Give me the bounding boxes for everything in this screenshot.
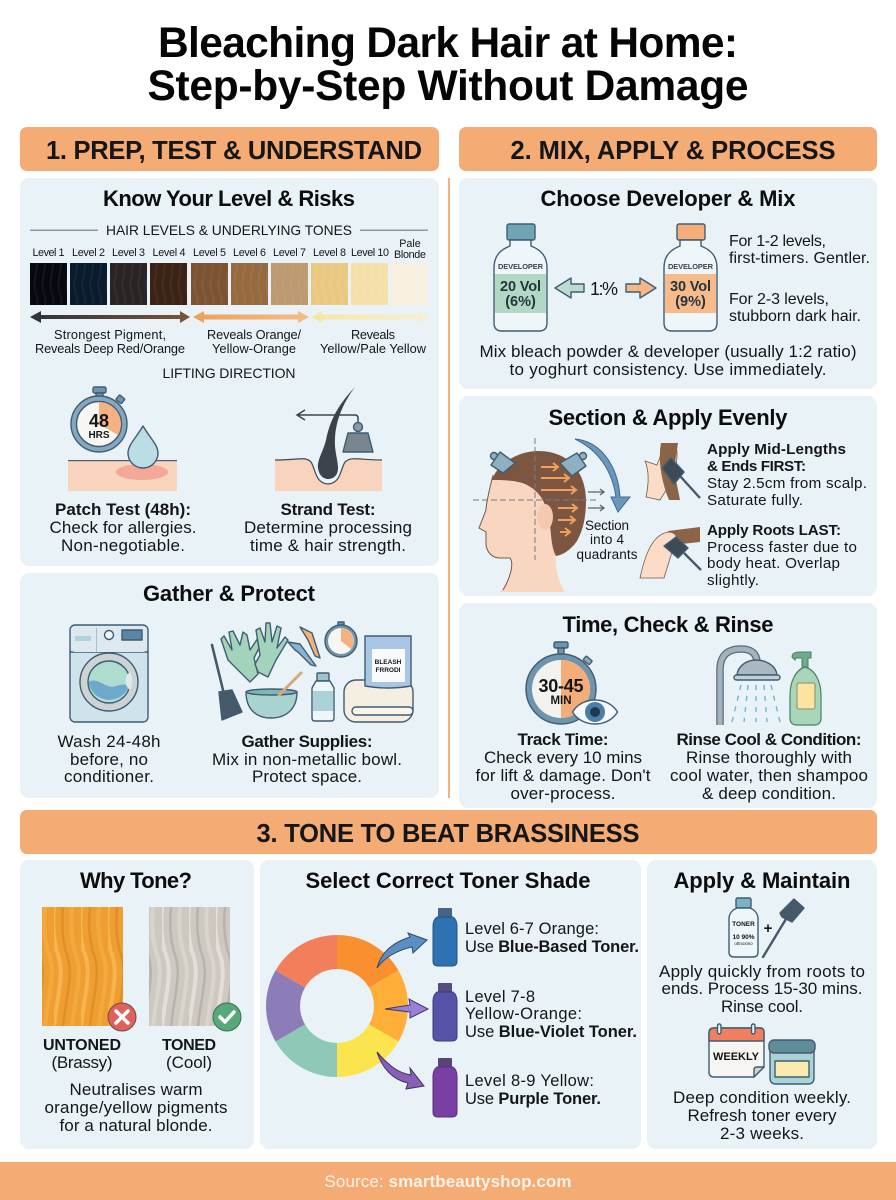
text: 30 vol use (729, 291, 861, 325)
text: strand test (244, 500, 412, 555)
text: apply: Rinse cool. (721, 997, 803, 1016)
swatch: untoned hair (42, 907, 123, 1026)
icon: stopwatch with eye (526, 642, 618, 724)
icon: patch test stopwatch and drop (68, 387, 177, 491)
icon: bottle 20 vol: (6%) (505, 294, 536, 310)
text: rinse: & deep condition. (702, 784, 836, 803)
text: track time: for lift & damage. Don't (476, 766, 651, 785)
level labels: Level 7 (273, 247, 306, 259)
text: why tone (44, 1080, 228, 1135)
icon: toner bottle and brush: ottnoxino (734, 941, 753, 946)
text: why tone: orange/yellow pigments (44, 1098, 228, 1117)
level labels: Level 5 (193, 247, 226, 259)
footer: source (0, 1162, 896, 1200)
level labels (32, 238, 426, 261)
label: ratio: 1:% (590, 279, 618, 299)
text: wash (58, 732, 160, 786)
icon: patch test stopwatch and drop: 48 (89, 411, 109, 431)
arrow: left (555, 278, 584, 298)
section header 3 (20, 810, 877, 854)
heading: Choose Developer & Mix (540, 186, 796, 211)
text: apply: Apply quickly from roots to (659, 962, 865, 981)
title: Bleaching Dark Hair at Home: (158, 20, 738, 67)
level labels: Pale (399, 238, 421, 250)
tone descriptions: Reveals (351, 327, 395, 342)
heading: Why Tone? (80, 868, 192, 893)
icon: toner bottle and brush: + (764, 920, 773, 937)
icon: developer bottle (312, 673, 334, 721)
heading: Apply & Maintain (674, 868, 850, 893)
text: level 8-9 (465, 1072, 601, 1108)
tone descriptions: Yellow-Orange (212, 341, 296, 356)
clips (490, 452, 586, 476)
icon: washing machine (70, 625, 148, 722)
icon: toner bottle and brush (729, 898, 804, 957)
icon: patch test stopwatch and drop: HRS (88, 430, 110, 441)
subheading: hair levels: HAIR LEVELS & UNDERLYING TONES (106, 223, 352, 238)
hair level swatches (30, 263, 428, 305)
icon: bottle 20 vol: 20 Vol (500, 279, 541, 295)
text: maintain: 2-3 weeks. (720, 1124, 804, 1143)
panel: apply and maintain (647, 860, 877, 1149)
icon: hand applying to roots (640, 527, 701, 578)
text: level 6-7: Use Blue-Based Toner. (465, 938, 639, 956)
chart: colour wheel (266, 935, 408, 1077)
section header 2: 2. MIX, APPLY & PROCESS (510, 137, 836, 165)
icon: strand test (275, 387, 382, 491)
icon: weekly calendar (709, 1024, 764, 1077)
text: apply: ends. Process 15-30 mins. (662, 979, 862, 998)
arrows on hair (541, 463, 577, 536)
icon: bleach bag (365, 636, 411, 688)
level labels: Level 2 (72, 247, 105, 259)
text: 30 vol use: stubborn dark hair. (729, 308, 861, 325)
text: roots: Process faster due to (707, 539, 857, 556)
level labels: Level 10 (351, 247, 389, 259)
level labels: Level 6 (233, 247, 266, 259)
section header 1: 1. PREP, TEST & UNDERSTAND (46, 137, 422, 165)
text: gather supplies: Mix in non-metallic bowl. (212, 750, 402, 769)
text: patch test: Non-negotiable. (61, 536, 185, 555)
heading: Time, Check & Rinse (562, 612, 774, 637)
text: track time: Track Time: (518, 730, 608, 749)
text: roots (707, 522, 857, 589)
icon: brush (212, 645, 242, 720)
text: track time: over-process. (510, 784, 616, 803)
text: mid-lengths (707, 441, 867, 509)
icon: blue-violet toner bottle (433, 983, 457, 1041)
title (148, 20, 748, 110)
section header 2 (459, 127, 877, 171)
text: apply (659, 962, 865, 1016)
text: section: Section (585, 518, 629, 533)
text: section: quadrants (576, 547, 638, 562)
text: mix instructions: to yoghurt consistency. Use immediately. (510, 360, 826, 379)
icon: bleach bag: FRRODI (376, 667, 401, 674)
tone descriptions: Reveals Deep Red/Orange (35, 341, 185, 356)
label: lifting direction: LIFTING DIRECTION (162, 365, 296, 381)
level labels: Blonde (394, 249, 426, 261)
text: level 6-7: Level 6-7 Orange: (465, 920, 599, 938)
icon: toner bottle and brush: TONER (732, 921, 755, 928)
icon: toner bottle and brush: 10 90% (732, 934, 755, 941)
text: level 7-8: Level 7-8 (465, 988, 535, 1006)
icon: hand applying to lengths (645, 443, 700, 500)
icon: bottle 30 vol (664, 224, 717, 331)
heading: Section & Apply Evenly (548, 405, 788, 430)
section header 3: 3. TONE TO BEAT BRASSINESS (256, 820, 640, 848)
icon: red cross badge (108, 1003, 136, 1031)
footer: source: Source: smartbeautyshop.com (324, 1172, 572, 1191)
text: gather supplies: Gather Supplies: (242, 732, 372, 751)
text: track time: Check every 10 mins (484, 748, 642, 767)
panel: select toner shade (260, 860, 641, 1149)
icon: gloves (221, 623, 288, 682)
text: roots: body heat. Overlap (707, 555, 840, 572)
text: mid-lengths: & Ends FIRST: (707, 458, 806, 475)
icon: stopwatch with eye: MIN (550, 695, 572, 707)
text: level 7-8: Yellow-Orange: (465, 1005, 582, 1023)
arrow: curved blue (575, 439, 630, 512)
icon: green check badge (213, 1003, 241, 1031)
panel: why tone (20, 860, 254, 1149)
icon: bottle 30 vol: (9%) (675, 294, 706, 310)
text: level 8-9: Use Purple Toner. (465, 1090, 601, 1108)
tone arrows (30, 311, 429, 323)
text: gather supplies: Protect space. (252, 767, 362, 786)
section header 1 (20, 127, 439, 171)
text: gather supplies (212, 732, 402, 786)
panel: choose developer and mix (459, 178, 877, 389)
title: Step-by-Step Without Damage (148, 63, 748, 110)
text: wash: conditioner. (64, 767, 154, 786)
panel: time check and rinse (459, 603, 877, 808)
label: toned: TONED (162, 1037, 216, 1054)
icon: bottle 20 vol: DEVELOPER (498, 262, 544, 271)
text: 20 vol use: first-timers. Gentler. (729, 250, 870, 267)
icon: conditioner bottle (790, 652, 821, 725)
heading: Select Correct Toner Shade (306, 868, 590, 893)
tone descriptions: Yellow/Pale Yellow (320, 341, 427, 356)
text: level 8-9: Level 8-9 Yellow: (465, 1072, 594, 1090)
icon: blue toner bottle (433, 908, 457, 966)
label: untoned: (Brassy) (52, 1053, 112, 1072)
heading: Gather & Protect (143, 581, 316, 606)
text: mix instructions (480, 342, 856, 379)
text: why tone: for a natural blonde. (60, 1116, 212, 1135)
level labels: Level 8 (313, 247, 346, 259)
text: why tone: Neutralises warm (70, 1080, 202, 1099)
label: untoned (43, 1037, 121, 1072)
text: strand test: Determine processing (244, 518, 412, 537)
text: rinse (670, 730, 868, 803)
text: 20 vol use: For 1-2 levels, (729, 233, 826, 250)
arrow: to blue-violet toner (385, 999, 428, 1018)
tone descriptions: Reveals Orange/ (207, 327, 301, 342)
arrow: to blue toner (377, 933, 427, 968)
text: rinse: cool water, then shampoo (670, 766, 868, 785)
text: level 7-8: Use Blue-Violet Toner. (465, 1023, 637, 1041)
text: maintain (673, 1088, 851, 1143)
panel: section and apply evenly (459, 396, 877, 596)
icon: stopwatch with eye: 30-45 (538, 676, 584, 696)
text: track time (476, 730, 651, 803)
icon: bottle 20 vol (494, 224, 547, 331)
label: toned: (Cool) (166, 1053, 212, 1072)
text: section: into 4 (590, 532, 624, 547)
text: wash: before, no (70, 750, 148, 769)
arrow: to purple toner (377, 1052, 424, 1089)
icon: weekly calendar: WEEKLY (713, 1051, 760, 1063)
icon: mixing bowl (246, 673, 301, 718)
heading: Know Your Level & Risks (103, 186, 355, 211)
icon: supplies (212, 622, 413, 722)
icon: towel (344, 680, 413, 722)
text: 30 vol use: For 2-3 levels, (729, 291, 829, 308)
icon: head with quadrants (473, 438, 630, 592)
text: level 6-7 (465, 920, 639, 956)
text: wash: Wash 24-48h (58, 732, 160, 751)
icon: purple toner bottle (433, 1058, 457, 1117)
icon: conditioner jar (769, 1040, 815, 1084)
icon: clips (288, 627, 320, 666)
text: patch test: Patch Test (48h): (55, 500, 191, 519)
text: rinse: Rinse thoroughly with (686, 748, 852, 767)
text: rinse: Rinse Cool & Condition: (676, 730, 862, 749)
text: roots: Apply Roots LAST: (707, 522, 841, 539)
swatch: toned hair (149, 907, 230, 1026)
panel: know your level and risks (20, 178, 439, 566)
text: mid-lengths: Saturate fully. (707, 492, 803, 509)
text: patch test: Check for allergies. (50, 518, 196, 537)
text: roots: slightly. (707, 572, 759, 589)
text: level 7-8 (465, 988, 637, 1041)
text: mid-lengths: Apply Mid-Lengths (707, 441, 846, 458)
icon: shower (720, 649, 780, 725)
level labels: Level 4 (152, 247, 186, 259)
text: strand test: time & hair strength. (250, 536, 406, 555)
text: section (576, 518, 638, 562)
text: patch test (50, 500, 196, 555)
icon: small timer (325, 622, 357, 657)
arrow: right (626, 278, 656, 298)
tone descriptions (35, 327, 427, 356)
tone descriptions: Strongest Pigment, (54, 327, 166, 342)
text: mid-lengths: Stay 2.5cm from scalp. (707, 475, 867, 492)
text: maintain: Refresh toner every (688, 1106, 837, 1125)
label: toned (162, 1037, 216, 1072)
text: mix instructions: Mix bleach powder & developer (usually 1:2 ratio) (480, 342, 856, 361)
text: 20 vol use (729, 233, 870, 267)
icon: bleach bag: BLEASH (375, 659, 402, 666)
panel: gather and protect (20, 573, 439, 798)
icon: bottle 30 vol: 30 Vol (670, 279, 711, 295)
label: untoned: UNTONED (43, 1037, 121, 1054)
level labels: Level 3 (112, 247, 145, 259)
icon: bottle 30 vol: DEVELOPER (668, 262, 714, 271)
level labels: Level 1 (32, 247, 64, 259)
text: maintain: Deep condition weekly. (673, 1088, 851, 1107)
text: strand test: Strand Test: (280, 500, 376, 519)
